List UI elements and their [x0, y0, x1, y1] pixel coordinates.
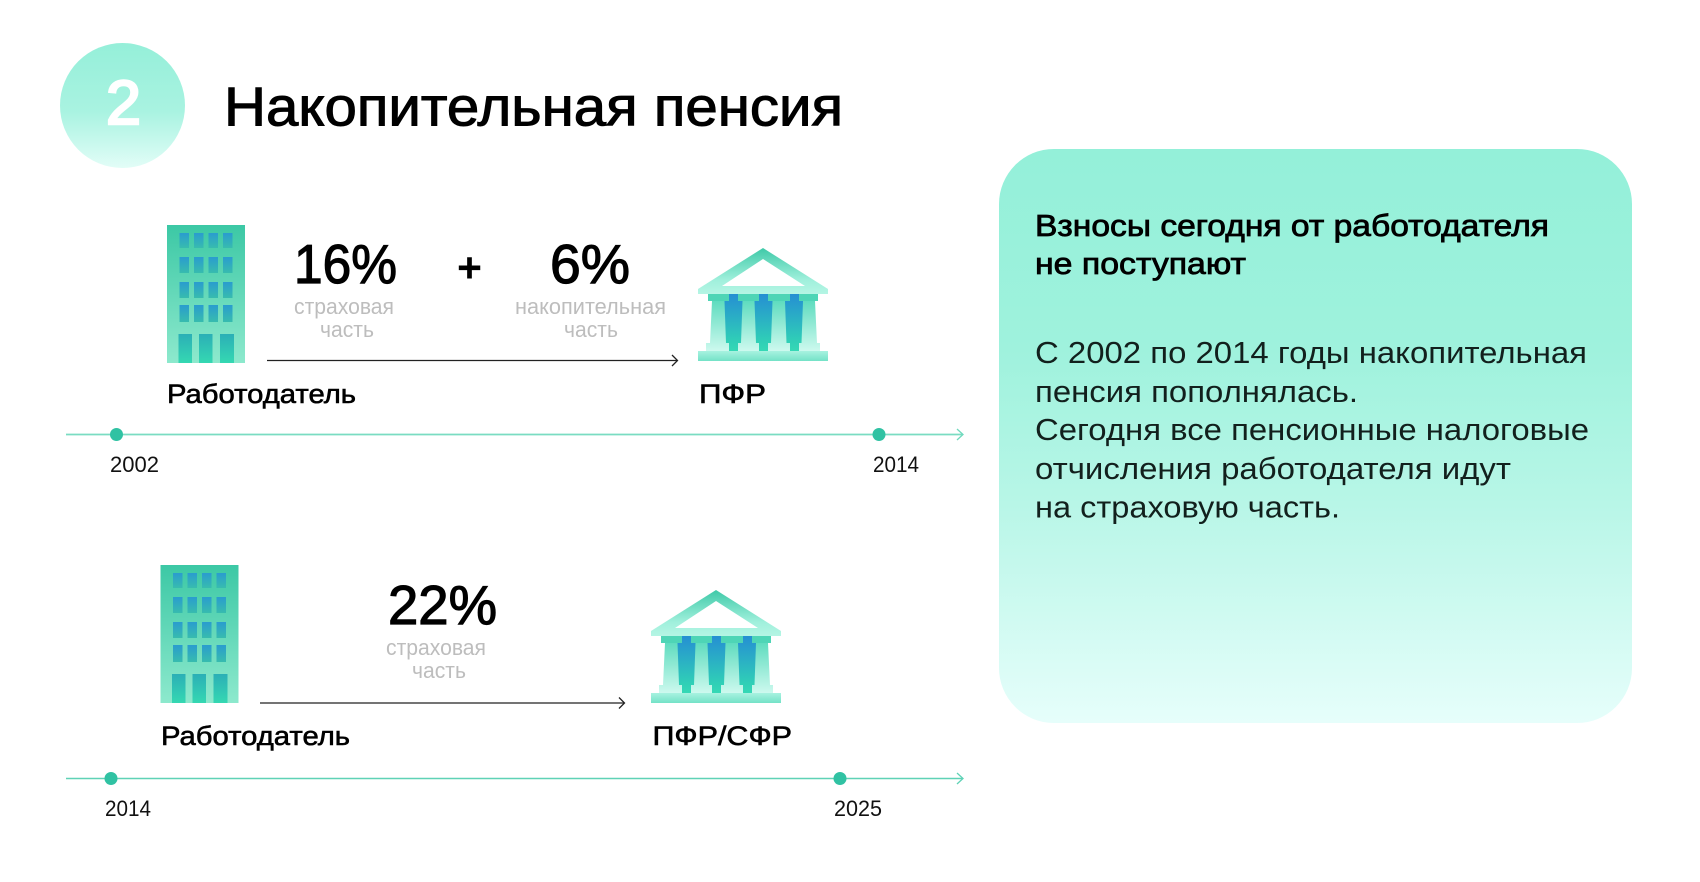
icon: fund building 2002	[698, 248, 828, 361]
panel heading: не поступают	[1035, 246, 1246, 281]
arrow: employer to fund 2014	[260, 698, 624, 708]
icon: fund building 2014	[651, 590, 781, 703]
title: Накопительная пенсия	[224, 76, 843, 138]
label: fund successor: ПФР/СФР	[652, 721, 792, 751]
22 percent insurance share: часть	[412, 658, 466, 683]
panel heading: Взносы сегодня от работодателя	[1035, 208, 1549, 243]
label: employer: Работодатель	[161, 721, 350, 751]
22 percent insurance share: страховая	[386, 635, 486, 660]
plus sign: +	[457, 244, 482, 291]
timeline 2002-2014: 2014	[873, 452, 919, 477]
timeline 2014-2025: 2025	[834, 796, 882, 821]
16 percent insurance share: 16%	[294, 233, 397, 295]
number badge: 2	[106, 69, 141, 138]
timeline 2014-2025	[66, 772, 963, 821]
6 percent funded share	[515, 233, 666, 342]
arrow: employer to fund 2002	[267, 355, 678, 366]
panel body text: на страховую часть.	[1035, 490, 1340, 524]
timeline 2014-2025: 2014	[105, 796, 151, 821]
16 percent insurance share: страховая	[294, 294, 394, 319]
6 percent funded share: 6%	[550, 233, 630, 295]
timeline 2002-2014	[66, 428, 963, 477]
16 percent insurance share: часть	[320, 317, 374, 342]
timeline 2002-2014: 2002	[110, 452, 159, 477]
icon: employer building 2014	[160, 565, 238, 703]
panel heading	[1035, 208, 1549, 281]
16 percent insurance share	[294, 233, 397, 342]
panel body text: С 2002 по 2014 годы накопительная	[1035, 335, 1587, 370]
6 percent funded share: накопительная	[515, 294, 666, 319]
icon: employer building 2002	[167, 225, 245, 363]
panel body text: пенсия пополнялась.	[1035, 374, 1358, 409]
number badge	[60, 43, 185, 168]
panel: explanation	[999, 149, 1632, 723]
label: fund: ПФР	[699, 379, 766, 409]
panel body text: Сегодня все пенсионные налоговые	[1035, 412, 1589, 447]
panel body text	[1035, 335, 1589, 524]
6 percent funded share: часть	[564, 317, 618, 342]
22 percent insurance share: 22%	[388, 574, 497, 636]
22 percent insurance share	[386, 574, 497, 683]
panel body text: отчисления работодателя идут	[1035, 451, 1511, 486]
label: employer: Работодатель	[167, 379, 356, 409]
